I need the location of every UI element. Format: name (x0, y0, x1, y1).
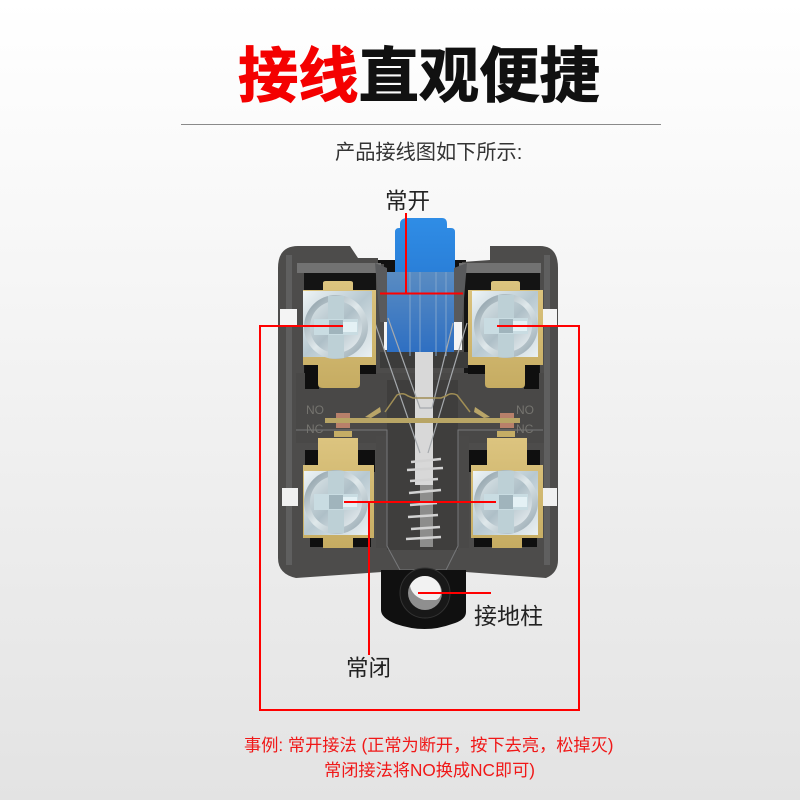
guide wires (375, 318, 467, 453)
title divider (181, 124, 661, 125)
spring (406, 459, 443, 539)
NO NC markings: NC (306, 422, 324, 436)
title: 接线直观便捷 (238, 42, 600, 110)
black recesses around terminal tabs (305, 365, 319, 389)
NO NC markings: NO (516, 403, 534, 417)
bottom left terminal (303, 438, 374, 548)
bottom right terminal (471, 438, 543, 548)
switch product illustration (278, 218, 558, 629)
footnote: 事例: 常开接法 (正常为断开，按下去亮，松掉灭) (244, 735, 614, 755)
label: normally open: 常开 (385, 189, 430, 214)
push button (378, 218, 466, 274)
label: normally closed: 常闭 (346, 656, 391, 681)
wiring: normally open (380, 213, 463, 294)
top right terminal (468, 281, 543, 388)
copper contact bridge (325, 394, 520, 437)
NO NC markings: NC (516, 422, 534, 436)
translucent blue plunger (375, 263, 468, 368)
grounding post (381, 568, 466, 629)
white side gaps (280, 309, 297, 326)
footnote (244, 735, 614, 780)
footnote: 常闭接法将NO换成NC即可) (324, 760, 535, 780)
label: grounding post: 接地柱 (474, 603, 543, 629)
NO NC markings (306, 403, 534, 436)
wiring: normally closed (344, 502, 496, 655)
top left terminal (303, 281, 376, 388)
wiring: grounding (418, 592, 491, 594)
switch housing (278, 246, 558, 578)
wiring: sample circuit loop (260, 326, 579, 710)
central white actuator (415, 352, 433, 547)
subtitle: 产品接线图如下所示: (335, 141, 522, 164)
NO NC markings: NO (306, 403, 324, 417)
